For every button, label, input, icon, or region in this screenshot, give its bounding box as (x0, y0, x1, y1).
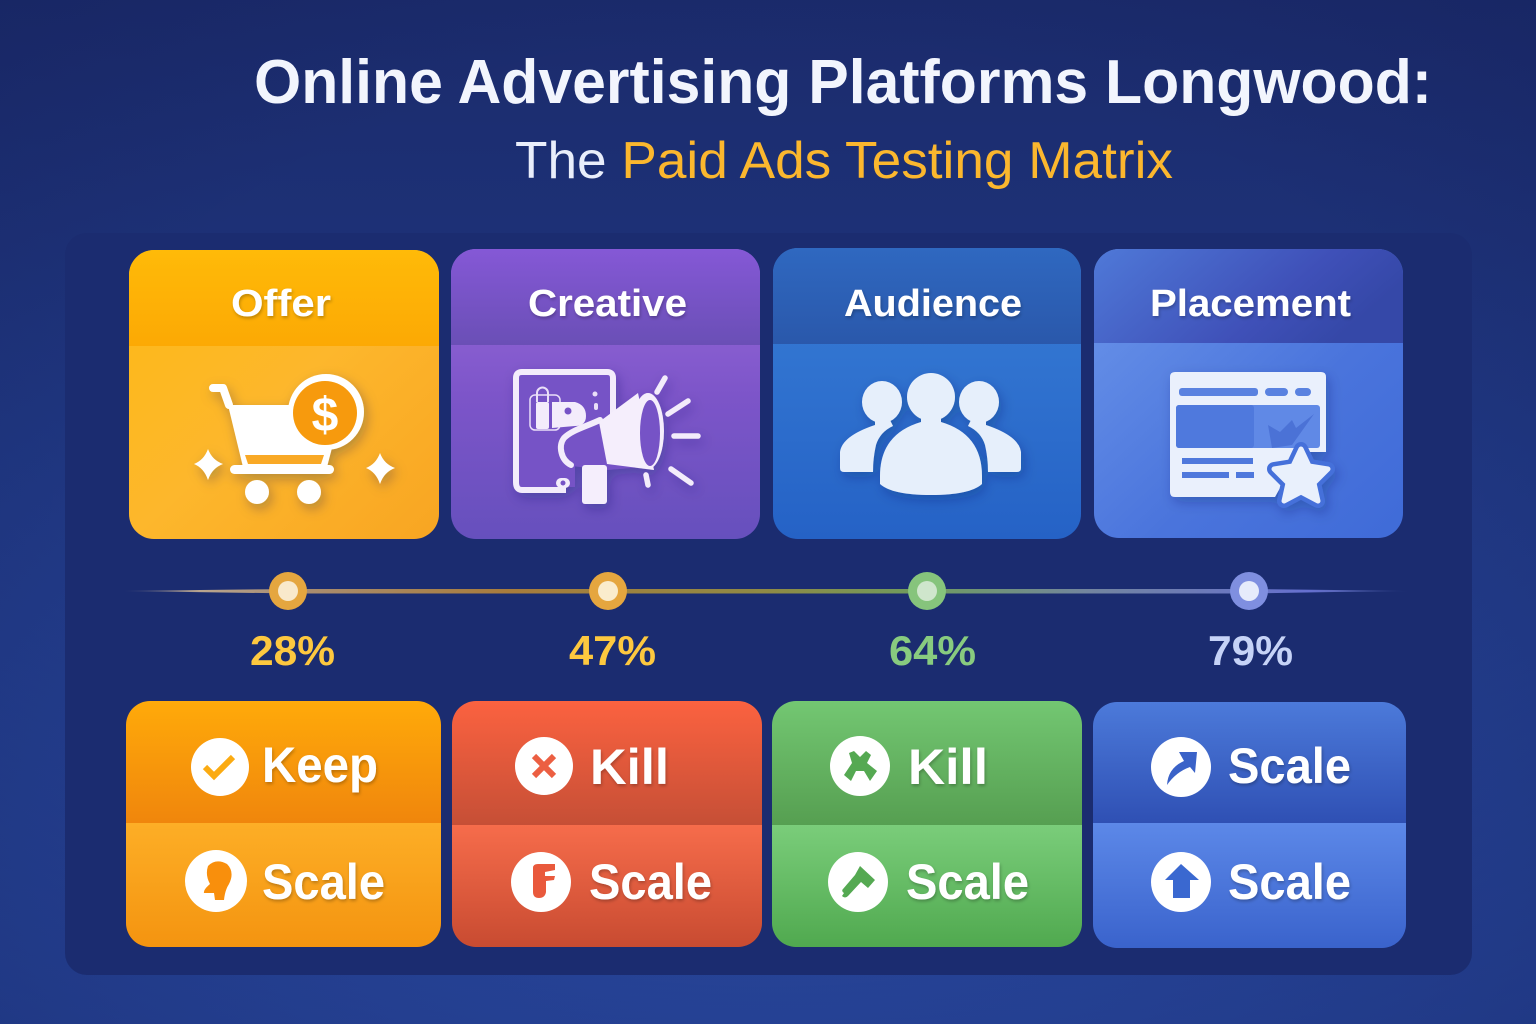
action: kill: Kill (590, 739, 669, 795)
action: scale up: Scale (1228, 854, 1351, 910)
icon: web page with star (1170, 372, 1328, 501)
value: 47%: 47% (569, 627, 656, 674)
value: 79%: 79% (1208, 627, 1293, 674)
marker: 79% (1230, 572, 1268, 610)
action: scale up-right (1151, 737, 1351, 797)
action: scale (185, 850, 385, 912)
icon: tablet and megaphone (516, 372, 698, 504)
card: placement (1094, 249, 1403, 538)
action: keep (191, 737, 378, 796)
action: kill (515, 737, 669, 795)
action: kill: Kill (908, 739, 988, 795)
action: scale up-right: Scale (1228, 738, 1351, 794)
marker: 47% (589, 572, 627, 610)
action card: placement (1093, 702, 1406, 948)
action: scale (511, 852, 712, 912)
heading: offer: Offer (231, 283, 331, 325)
value: 64%: 64% (889, 627, 976, 674)
icon: shopping cart with dollar coin: $ (312, 389, 339, 442)
card: audience (773, 248, 1081, 539)
card: offer (129, 250, 439, 539)
panel: testing matrix (65, 233, 1472, 975)
action card: creative (452, 701, 762, 947)
value: 28%: 28% (250, 627, 335, 674)
heading: audience: Audience (844, 283, 1022, 325)
marker: 28% (269, 572, 307, 610)
card: creative (451, 249, 760, 539)
action card: audience (772, 701, 1082, 947)
action: scale up (1151, 852, 1351, 912)
action: scale (828, 852, 1029, 912)
action: scale: Scale (906, 854, 1029, 910)
subtitle: The Paid Ads Testing Matrix (515, 132, 1173, 190)
marker: 64% (908, 572, 946, 610)
action: kill (830, 736, 988, 796)
heading: creative: Creative (528, 283, 687, 325)
action: scale: Scale (589, 854, 712, 910)
action: scale: Scale (262, 854, 385, 910)
icon: group of three people (840, 373, 1021, 495)
action: keep: Keep (262, 737, 378, 793)
timeline (122, 572, 1411, 610)
title: Online Advertising Platforms Longwood: (254, 48, 1432, 117)
action card: offer (126, 701, 441, 947)
icon: shopping cart with dollar coin (194, 374, 395, 504)
heading: placement: Placement (1150, 283, 1351, 325)
